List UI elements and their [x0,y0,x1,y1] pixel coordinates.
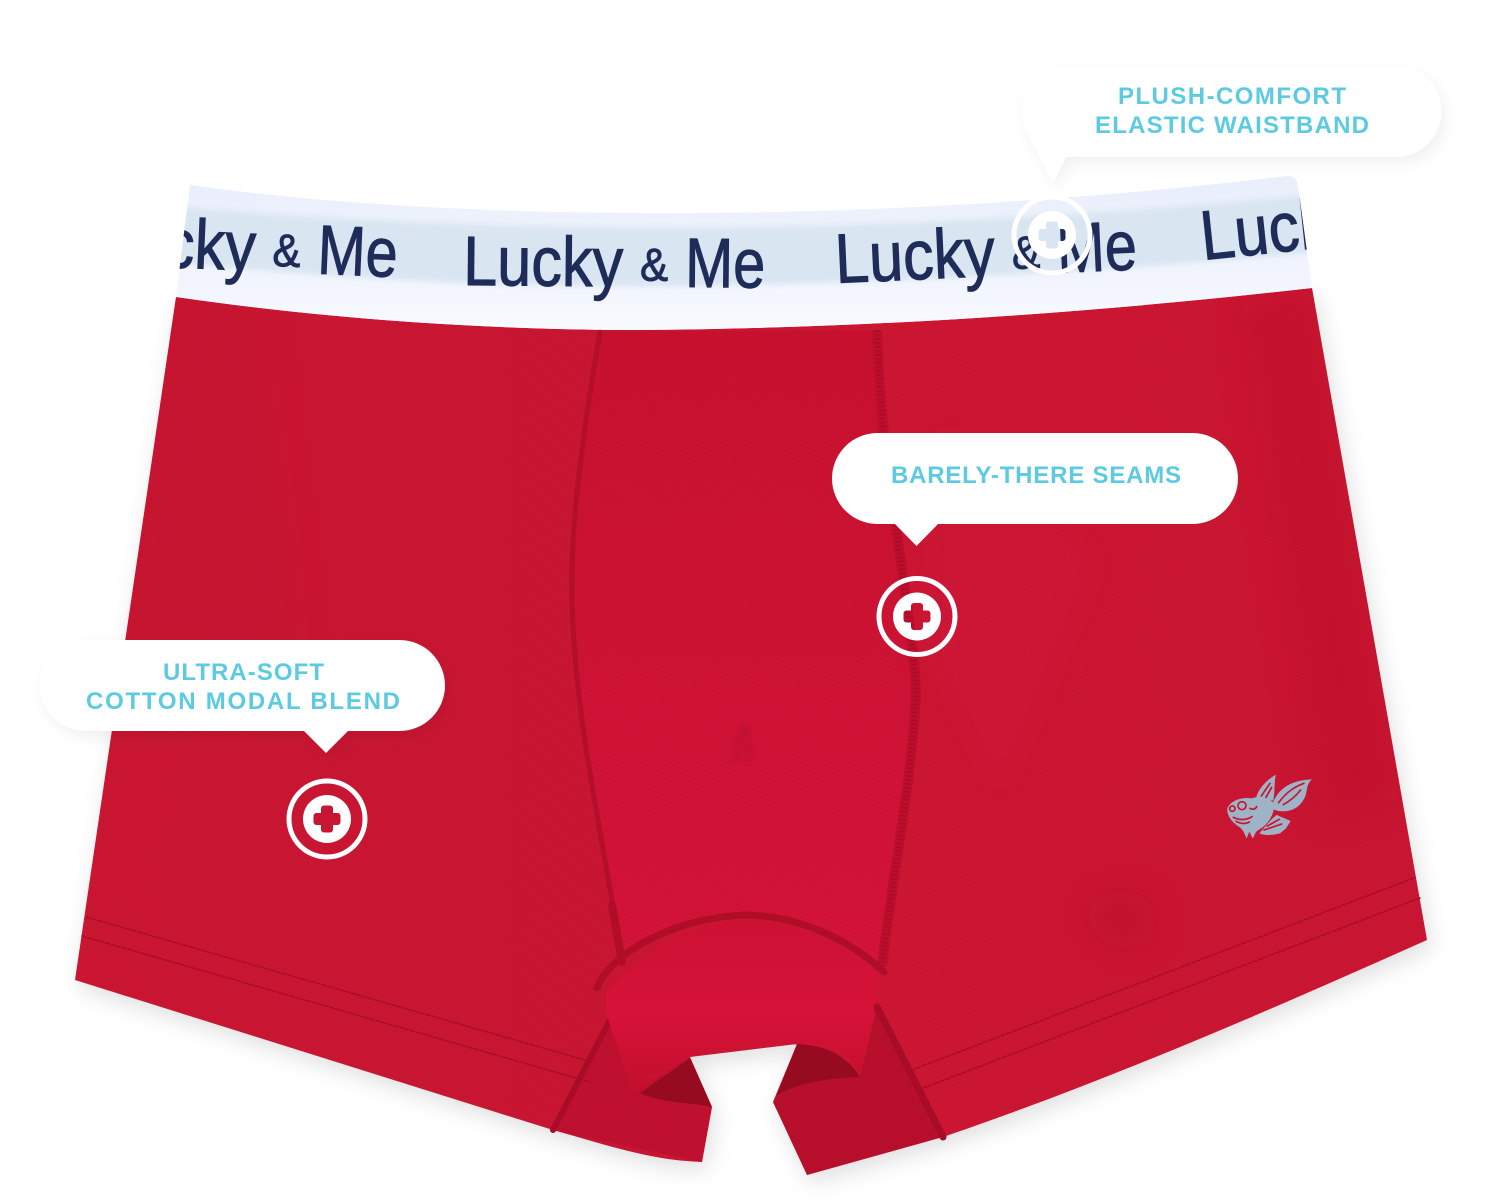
label text: PLUSH-COMFORT [1118,83,1346,110]
label text: COTTON MODAL BLEND [86,688,400,715]
logo repeat: left: & [272,224,302,277]
callout: barely-there seams [832,433,1238,546]
bubble shape [1022,66,1442,183]
logo repeat: right [838,222,1135,292]
left fly seam [572,332,622,962]
icon: plus marker on fabric [289,781,365,857]
icon: plus marker on seams [879,578,955,654]
logo repeat: right: Me [1055,206,1138,288]
label text: ELASTIC WAISTBAND [1095,112,1369,139]
bubble shape [40,640,445,753]
logo repeat: centre [468,234,764,302]
icon: goldfish logo [1227,775,1312,838]
right leg seam [877,1007,943,1137]
garment: red boxer briefs [75,176,1434,1185]
gusset seam [597,915,884,988]
callout: ultra-soft cotton modal blend [40,640,445,753]
label text [1095,83,1369,139]
label text: BARELY-THERE SEAMS [891,462,1181,489]
fabric shading [126,288,1404,1175]
logo repeat: left [180,217,396,285]
right fly seam [877,330,916,966]
logo repeat: right: & [1011,226,1041,279]
waistband [176,176,1312,330]
woven logo strip [170,194,1320,286]
logo repeat: centre: Lucky [463,222,624,301]
bubble shape [832,433,1238,546]
logo repeat: left: Me [316,211,399,292]
left leg seam [553,1020,610,1130]
icon: plus marker on waistband [1014,197,1090,273]
logo repeat: left: Lucky [94,201,258,286]
hem stitching [82,878,1420,1090]
garment body [75,288,1427,1175]
logo repeat: centre: & [640,239,668,291]
label text [86,659,400,715]
logo repeat: far right: Lucky [1196,181,1364,275]
label text: ULTRA-SOFT [163,659,324,686]
callout: plush-comfort elastic waistband [1022,66,1442,183]
logo repeat: centre: Me [685,224,766,303]
gusset [606,920,880,1107]
seams [82,330,1420,1137]
logo repeat: right: Lucky [833,213,997,298]
